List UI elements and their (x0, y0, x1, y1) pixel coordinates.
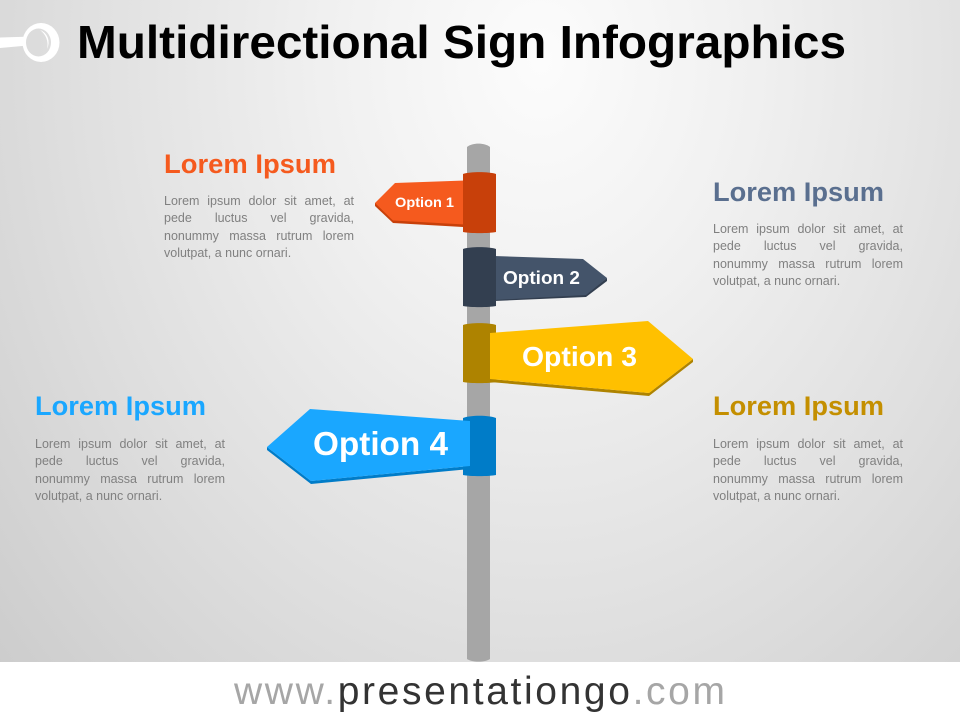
pole (467, 144, 490, 662)
text block: top right: Lorem ipsum dolor sit amet, at (713, 222, 903, 236)
sign: option 1: Option 1 (395, 194, 454, 210)
text block: bottom left: volutpat, a nunc ornari. (35, 489, 162, 503)
sign: option 3 (463, 321, 693, 396)
text block: top left: pede luctus vel gravida, (164, 211, 354, 225)
text block: bottom right (713, 437, 903, 503)
footer url: www.presentationgo.com (233, 670, 725, 713)
sign: option 2 (463, 247, 607, 307)
sign: option 4: Option 4 (313, 425, 449, 462)
sign: option 4 (267, 409, 496, 484)
icon: magnifier ring (0, 23, 60, 62)
text block: top left: nonummy massa rutrum lorem (164, 229, 354, 243)
text block: top right: nonummy massa rutrum lorem (713, 257, 903, 271)
heading: bottom left: Lorem Ipsum (35, 391, 206, 421)
text block: bottom left: nonummy massa rutrum lorem (35, 472, 225, 486)
text block: bottom left (35, 437, 225, 503)
text block: top right (713, 222, 903, 288)
sign: option 1 (375, 172, 496, 233)
sign: option 3: Option 3 (522, 341, 637, 372)
text block: bottom right: pede luctus vel gravida, (713, 454, 903, 468)
text block: bottom left: Lorem ipsum dolor sit amet, at (35, 437, 225, 451)
heading: top left: Lorem Ipsum (164, 149, 336, 179)
text block: top right: volutpat, a nunc ornari. (713, 274, 840, 288)
heading: bottom right: Lorem Ipsum (713, 391, 884, 421)
text block: bottom right: volutpat, a nunc ornari. (713, 489, 840, 503)
text block: top left: volutpat, a nunc ornari. (164, 246, 291, 260)
text block: bottom right: Lorem ipsum dolor sit amet, at (713, 437, 903, 451)
sign: option 2: Option 2 (503, 267, 580, 288)
heading: top right: Lorem Ipsum (713, 177, 884, 207)
text block: top right: pede luctus vel gravida, (713, 239, 903, 253)
text block: bottom right: nonummy massa rutrum lorem (713, 472, 903, 486)
text block: top left (164, 194, 354, 260)
text block: bottom left: pede luctus vel gravida, (35, 454, 225, 468)
title: Multidirectional Sign Infographics (77, 16, 846, 68)
text block: top left: Lorem ipsum dolor sit amet, at (164, 194, 354, 208)
